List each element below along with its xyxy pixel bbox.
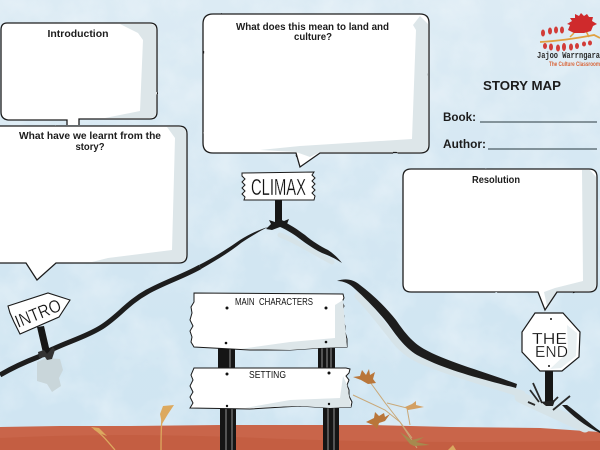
dry plants	[91, 369, 456, 450]
author field: Author:	[443, 137, 486, 151]
title: story map: STORY MAP	[483, 78, 561, 93]
speech box: land and culture	[203, 14, 429, 167]
speech box: what have we learnt	[0, 126, 187, 280]
signpost: the end: THE	[532, 331, 567, 348]
logo: Jajoo Warrngara	[537, 13, 600, 68]
heading: what have we learnt: What have we learnt from the	[19, 131, 161, 142]
hill shadow	[37, 235, 585, 427]
signpost: main characters and setting: SETTING	[249, 369, 286, 381]
heading: land and culture: culture?	[294, 32, 332, 43]
hill line	[0, 219, 600, 433]
heading: land and culture	[236, 22, 389, 43]
speech box: resolution	[403, 169, 597, 310]
book field: Book:	[443, 110, 476, 124]
signpost: climax: CLIMAX	[251, 174, 306, 200]
red earth ground	[0, 425, 600, 450]
signpost: main characters and setting: MAIN CHARACTERS	[235, 296, 313, 308]
signpost: intro	[8, 293, 70, 360]
heading: land and culture: What does this mean to land and	[236, 22, 389, 33]
speech box: introduction	[1, 23, 157, 125]
signpost: climax	[242, 172, 315, 230]
heading: what have we learnt	[19, 131, 161, 153]
ground patch under intro sign	[37, 358, 63, 392]
signpost: the end	[522, 313, 580, 410]
signpost: main characters and setting	[190, 293, 352, 450]
signpost: intro: INTRO	[12, 295, 64, 332]
signpost: the end: END	[535, 344, 568, 361]
heading: resolution: Resolution	[472, 175, 520, 186]
heading: what have we learnt: story?	[76, 142, 104, 153]
heading: introduction: Introduction	[48, 29, 108, 40]
